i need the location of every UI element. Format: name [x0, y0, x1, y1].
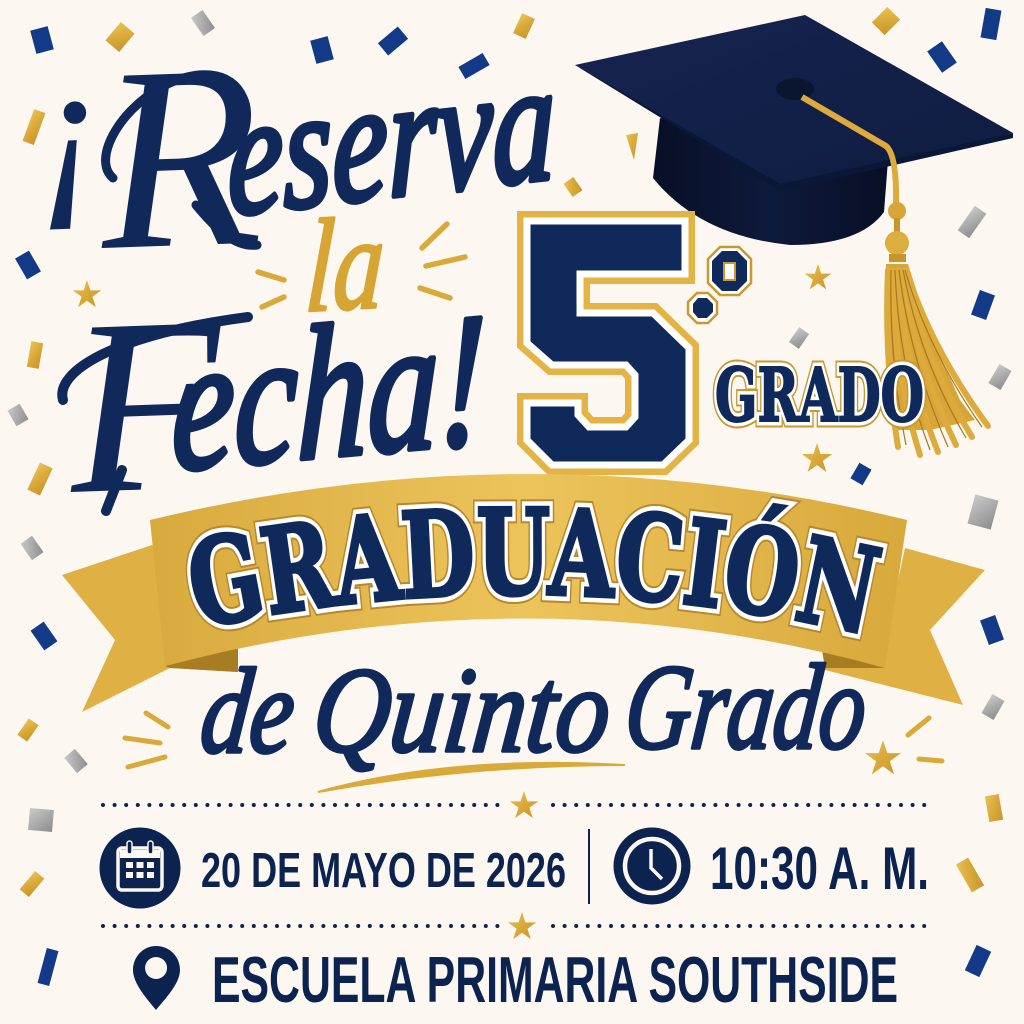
confetti: silver pieces: [7, 10, 1012, 832]
cap body: [653, 118, 888, 245]
ordinal mark: [688, 247, 751, 323]
heading: Fecha!: [62, 265, 488, 547]
stars: [73, 264, 901, 939]
label: GRADO: GRADO: [715, 353, 924, 439]
subtitle: de Quinto Grado: [195, 640, 873, 779]
gold swoosh: [318, 763, 625, 792]
big number 5: [527, 221, 689, 465]
icon: location pin: [133, 946, 180, 1010]
subtitle: de Quinto Grado: de: [195, 644, 301, 779]
icon: clock: [614, 828, 690, 904]
divider: [588, 829, 590, 904]
heading: ¡Reserva: R: [91, 10, 265, 305]
heading: ¡Reserva: eserva: [227, 24, 556, 253]
cap button: [776, 78, 814, 100]
main band: [150, 474, 907, 668]
icon: calendar: [100, 828, 180, 908]
heading: Fecha!: echa!: [170, 273, 488, 512]
graduation cap: [575, 15, 1013, 455]
heading: la: la: [302, 189, 388, 340]
cap board: [575, 15, 1013, 190]
heading: ¡Reserva: ¡: [30, 22, 111, 234]
banner title: GRADUACIÓN: GRADUACIÓN: [186, 496, 890, 642]
burst lines around la: [258, 224, 465, 307]
right fold: [822, 650, 885, 668]
left tail: [62, 545, 238, 712]
label: GRADO: GRADO: [715, 353, 924, 439]
heading: ¡Reserva: [30, 10, 556, 305]
right tail: [825, 548, 985, 705]
time text: 10:30 A. M.: [710, 835, 929, 902]
heading: Fecha!: F: [62, 265, 229, 547]
accent strokes: [125, 713, 942, 767]
banner title: GRADUACIÓN: GRADUACIÓN: [190, 502, 884, 634]
subtitle: de Quinto Grado: Grado: [619, 640, 873, 775]
subtitle: de Quinto Grado: Quinto: [307, 643, 617, 778]
date text: 20 DE MAYO DE 2026: [201, 844, 566, 898]
ribbon banner: [62, 474, 985, 712]
dotted divider top: [103, 803, 926, 807]
left fold: [165, 648, 238, 672]
tassel: [885, 202, 988, 455]
cord: [802, 97, 896, 205]
banner title: GRADUACIÓN: GRADUACIÓN: [187, 498, 888, 640]
label: GRADO: [715, 353, 924, 439]
dotted divider bottom: [103, 924, 926, 928]
label: GRADO: GRADO: [715, 353, 924, 439]
